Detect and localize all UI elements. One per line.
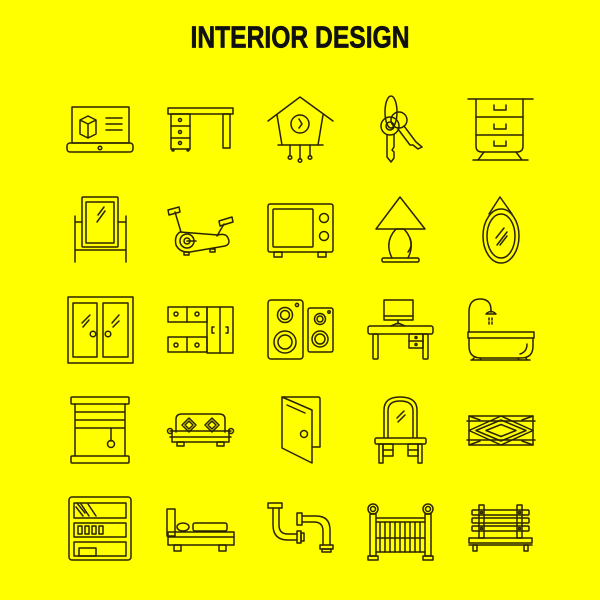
icon: table lamp — [376, 197, 425, 262]
icon: wardrobe cabinet — [168, 307, 233, 353]
icon: keys — [381, 96, 422, 162]
icon: speakers — [268, 300, 333, 359]
icon: bench — [469, 505, 532, 551]
icon: bed — [167, 509, 234, 551]
icon: cuckoo clock — [268, 97, 333, 162]
icon: roller blind window — [71, 397, 129, 463]
icon: window — [68, 297, 133, 363]
icon: bookshelf — [69, 497, 131, 560]
icon: door — [282, 397, 320, 463]
icon: dressing table — [375, 397, 426, 463]
icon: hanging oval mirror — [483, 197, 519, 263]
icon: bathtub — [468, 299, 534, 360]
icon: pipes — [268, 503, 333, 552]
icon: dresser — [468, 99, 533, 160]
icon: desk — [168, 108, 233, 151]
icon: laptop — [67, 107, 133, 152]
icon: microwave — [268, 204, 333, 257]
icon: rug — [467, 416, 535, 445]
icon: exercise bike — [168, 207, 233, 255]
icon: sofa — [168, 414, 234, 446]
icon: standing mirror — [75, 197, 126, 262]
icon: crib — [368, 504, 433, 560]
title: INTERIOR DESIGN — [190, 21, 410, 54]
icon: computer desk — [368, 300, 433, 359]
